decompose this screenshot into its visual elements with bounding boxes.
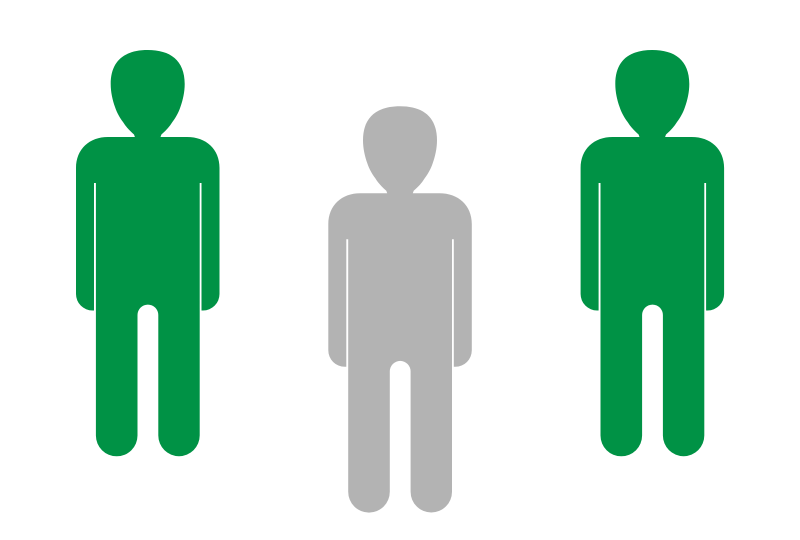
figure: right green person: [581, 50, 724, 456]
figure: left green person: [76, 50, 220, 456]
figure: center gray person: [328, 106, 472, 513]
